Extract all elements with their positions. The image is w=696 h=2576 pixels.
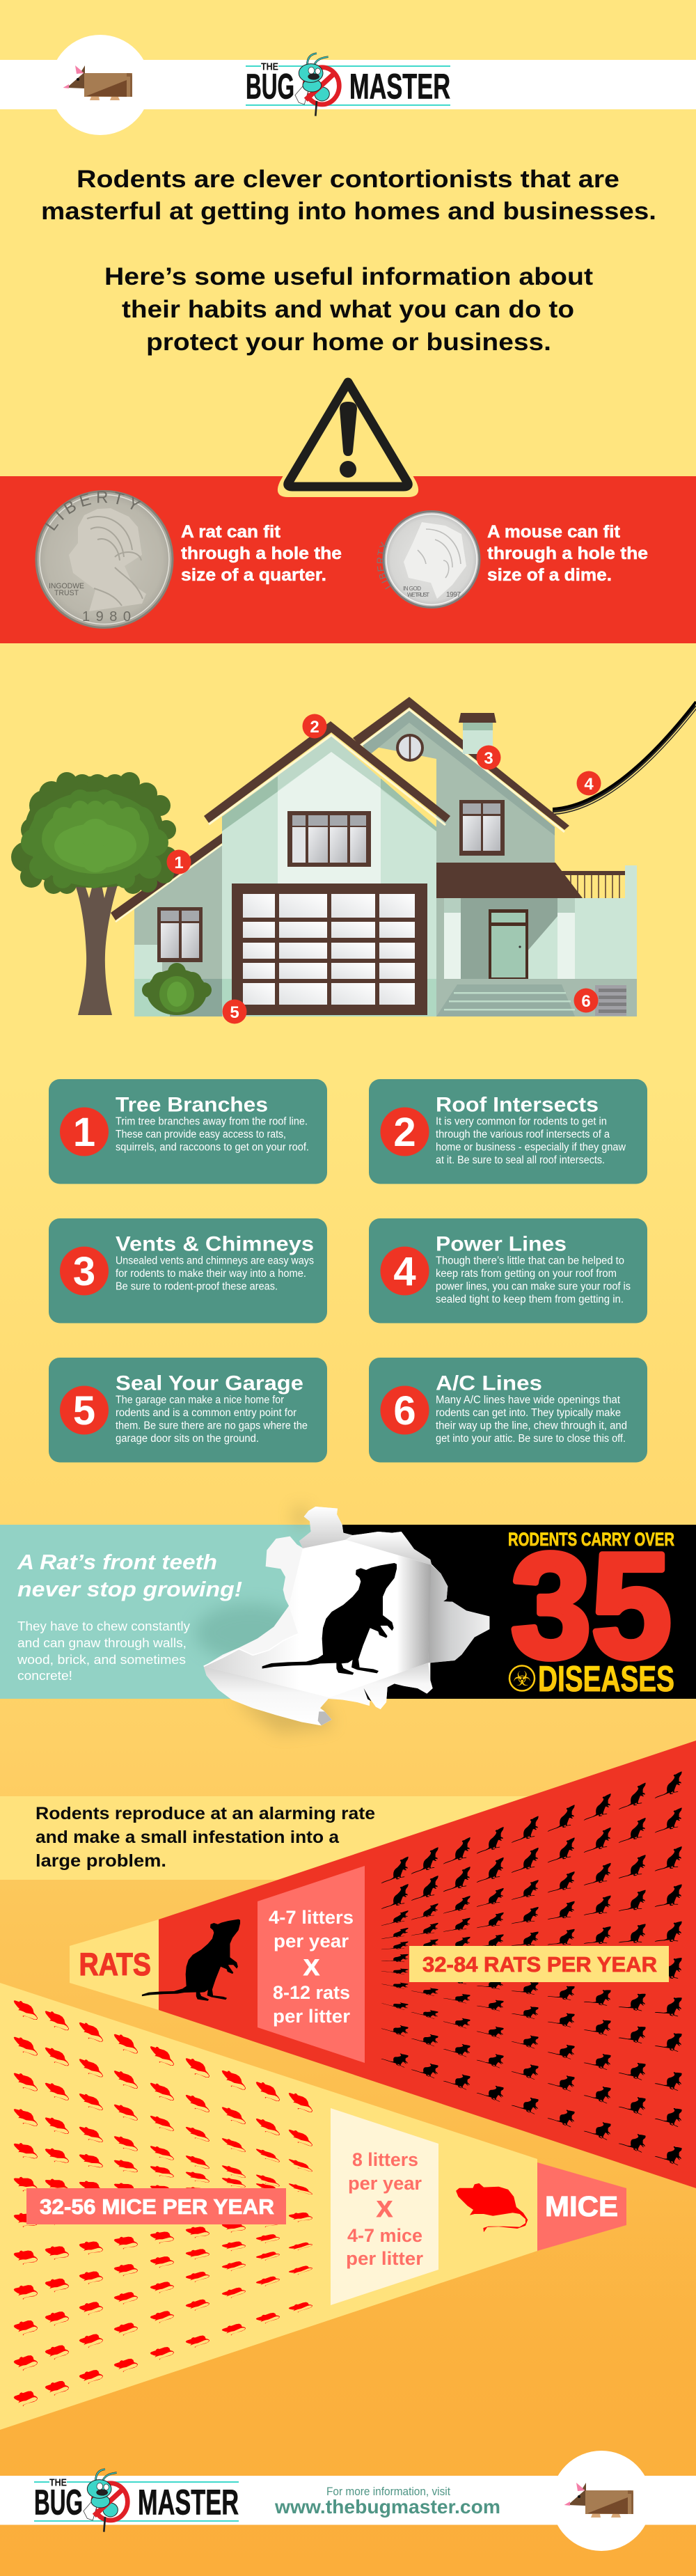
stat: rodents carry over 35 diseases: 35 bbox=[511, 1523, 672, 1689]
callout: mice per year bbox=[26, 2188, 286, 2224]
house illustration bbox=[11, 697, 696, 1023]
panel: mouse litter math: 4-7 mice bbox=[347, 2225, 422, 2246]
text: mouse fits through dime: through a hole the bbox=[487, 544, 648, 563]
card 5: seal your garage bbox=[49, 1358, 327, 1462]
panel: rat litter math bbox=[258, 1866, 365, 2063]
card 4: power lines: power lines, you can make sure your roof is bbox=[436, 1280, 631, 1292]
curl shadow on teal bbox=[195, 1601, 287, 1658]
label: mice: MICE bbox=[545, 2190, 618, 2222]
card 2: roof intersects: It is very common for rodents to get in bbox=[436, 1116, 607, 1128]
intro text: Here’s some useful information about bbox=[104, 263, 593, 290]
text: rat fits through quarter bbox=[181, 522, 342, 585]
logo: The Bug Master footer: THE bbox=[49, 2477, 67, 2489]
torn paper shadow bbox=[233, 1507, 334, 1734]
card 1: tree branches: Tree Branches bbox=[116, 1093, 268, 1117]
text: rat fits through quarter: size of a quarter. bbox=[181, 565, 326, 585]
front door bbox=[489, 909, 528, 979]
panel: coin sizes red band bbox=[0, 476, 696, 643]
card 2: roof intersects: 2 bbox=[393, 1110, 416, 1155]
card 6: A/C lines: 6 bbox=[393, 1388, 416, 1434]
porch railing bbox=[562, 871, 625, 898]
card 3: vents and chimneys: Be sure to rodent-proof these areas. bbox=[116, 1280, 278, 1292]
intro band: reproduction: Rodents reproduce at an alarming rate bbox=[35, 1804, 375, 1823]
chimney bbox=[459, 713, 496, 754]
intro text: protect your home or business. bbox=[146, 329, 551, 356]
card 5: seal your garage: garage door sits on the ground. bbox=[116, 1433, 259, 1445]
card 2: roof intersects: through the various roof intersects of a bbox=[436, 1129, 610, 1140]
icon: warning triangle bbox=[278, 372, 418, 497]
coin: dime: 1997 bbox=[446, 591, 461, 599]
label: rats: RATS bbox=[79, 1947, 151, 1982]
card 1: tree branches: 1 bbox=[73, 1110, 95, 1155]
text: rat teeth bbox=[17, 1550, 242, 1683]
garage door bbox=[232, 883, 427, 1015]
porch roof bbox=[436, 863, 583, 898]
card 4: power lines: 4 bbox=[393, 1249, 416, 1294]
intro text: masterful at getting into homes and businesses. bbox=[41, 198, 656, 225]
card 3: vents and chimneys: Vents & Chimneys bbox=[116, 1232, 314, 1256]
icon: rat bbox=[142, 1919, 240, 2001]
logo: The Bug Master footer: MASTER bbox=[138, 2483, 239, 2522]
card 4: power lines: Power Lines bbox=[436, 1232, 567, 1256]
footer band bbox=[0, 2451, 696, 2551]
card 5: seal your garage: rodents and is a common entry point for bbox=[116, 1407, 296, 1419]
text: rat fits through quarter: through a hole the bbox=[181, 544, 342, 563]
badges 1-6: 6 bbox=[581, 992, 591, 1011]
coin: quarter: 1980 bbox=[82, 609, 131, 625]
card 6: A/C lines: Many A/C lines have wide openings that bbox=[436, 1395, 621, 1406]
panel: rat litter math: per year bbox=[274, 1931, 349, 1951]
panel: mouse litter math: per year bbox=[348, 2173, 422, 2194]
intro text: Rodents are clever contortionists that are bbox=[77, 166, 619, 193]
text: mouse fits through dime: A mouse can fit bbox=[487, 522, 621, 542]
tree bbox=[11, 772, 177, 1015]
panel: rats funnel bbox=[70, 1741, 696, 2188]
card 6: A/C lines: their way up the line, chew through it, and bbox=[436, 1420, 627, 1431]
text: mouse fits through dime bbox=[487, 522, 648, 585]
panel: rat litter math: 4-7 litters bbox=[269, 1907, 354, 1928]
coin: quarter: LIBERTY bbox=[45, 492, 141, 531]
text: rat teeth: never stop growing! bbox=[17, 1577, 242, 1601]
badges 1-6 bbox=[167, 714, 601, 1023]
lower left window bbox=[157, 907, 203, 962]
panel: mouse litter math: per litter bbox=[346, 2248, 424, 2269]
logo: The Bug Master header: BUG bbox=[246, 67, 294, 107]
badges 1-6: 1 bbox=[174, 854, 184, 872]
card 6: A/C lines bbox=[369, 1358, 647, 1462]
card 1: tree branches bbox=[49, 1079, 327, 1184]
coin: dime: WE TRUST bbox=[407, 592, 429, 598]
intro band: reproduction bbox=[0, 1796, 528, 1880]
panel: mice funnel bbox=[0, 1983, 626, 2430]
text: rat teeth: wood, brick, and sometimes bbox=[17, 1653, 186, 1667]
panel: mouse litter math: X bbox=[377, 2197, 393, 2222]
callout: rats per year: 32-84 RATS PER YEAR bbox=[422, 1952, 657, 1977]
card 5: seal your garage: Seal Your Garage bbox=[116, 1372, 303, 1395]
card 1: tree branches: Trim tree branches away from the roof line. bbox=[116, 1116, 308, 1128]
text: mouse fits through dime: size of a dime. bbox=[487, 565, 612, 585]
logo: The Bug Master header: MASTER bbox=[349, 67, 450, 107]
card 3: vents and chimneys: 3 bbox=[73, 1249, 95, 1294]
card 6: A/C lines: get into your attic. Be sure to close this off. bbox=[436, 1433, 626, 1445]
card 1: tree branches: These can provide easy access to rats, bbox=[116, 1129, 286, 1140]
icon: footer rodent bbox=[564, 2483, 633, 2518]
card 4: power lines bbox=[369, 1218, 647, 1323]
header band bbox=[0, 35, 696, 135]
A/C unit bbox=[595, 985, 626, 1016]
rat silhouette bbox=[262, 1563, 397, 1675]
coin: dime bbox=[377, 510, 480, 608]
card 6: A/C lines: rodents can get into. They typically make bbox=[436, 1407, 621, 1419]
text: website bbox=[274, 2485, 500, 2518]
card 5: seal your garage: The garage can make a nice home for bbox=[116, 1395, 284, 1406]
logo: The Bug Master footer: BUG bbox=[34, 2483, 83, 2522]
panel: torn paper band bbox=[0, 1507, 696, 1734]
upper right window bbox=[459, 800, 505, 856]
panel: mouse litter math bbox=[331, 2108, 438, 2305]
text: website: For more information, visit bbox=[326, 2485, 450, 2498]
logo: The Bug Master footer bbox=[34, 2469, 239, 2532]
badges 1-6: 2 bbox=[310, 718, 319, 737]
mouse swarm bbox=[14, 1999, 313, 2410]
coin: quarter: INGODWE bbox=[49, 582, 84, 590]
panel: mouse litter math: 8 litters bbox=[352, 2149, 418, 2170]
logo: The Bug Master header bbox=[246, 54, 450, 116]
badges 1-6: 5 bbox=[230, 1003, 239, 1022]
front steps bbox=[436, 984, 575, 1016]
card 2: roof intersects: at it. Be sure to seal all roof intersects. bbox=[436, 1154, 605, 1166]
upper front window bbox=[287, 811, 371, 867]
house walls bbox=[134, 708, 637, 1016]
text: rat teeth: and can gnaw through walls, bbox=[17, 1636, 187, 1650]
panel: rat litter math: X bbox=[303, 1955, 320, 1980]
panel: rat litter math: 8-12 rats bbox=[273, 1982, 350, 2003]
intro text bbox=[41, 166, 656, 356]
card 2: roof intersects bbox=[369, 1079, 647, 1184]
card 3: vents and chimneys bbox=[49, 1218, 327, 1323]
logo: The Bug Master header: THE bbox=[261, 61, 278, 73]
power line bbox=[553, 702, 696, 813]
card 4: power lines: Though there’s little that can be helped to bbox=[436, 1255, 624, 1267]
coin: quarter bbox=[35, 490, 174, 629]
rat swarm bbox=[381, 1771, 682, 2167]
panel: rat litter math: per litter bbox=[273, 2006, 351, 2027]
card 5: seal your garage: 5 bbox=[73, 1388, 95, 1434]
icon: mouse bbox=[456, 2183, 528, 2232]
coin: dime: IN GOD bbox=[403, 586, 421, 592]
intro text: their habits and what you can do to bbox=[122, 296, 574, 323]
card 6: A/C lines: A/C Lines bbox=[436, 1372, 542, 1395]
bush bbox=[142, 963, 212, 1015]
intro band: reproduction: and make a small infestation into a bbox=[35, 1828, 340, 1847]
stat: rodents carry over 35 diseases: ☣ bbox=[513, 1667, 531, 1690]
text: rat teeth: They have to chew constantly bbox=[17, 1619, 190, 1633]
roofs bbox=[111, 697, 569, 922]
intro band: reproduction: large problem. bbox=[35, 1851, 166, 1871]
text: rat fits through quarter: A rat can fit bbox=[181, 522, 281, 542]
card 2: roof intersects: home or business - especially if they gnaw bbox=[436, 1141, 626, 1153]
badges 1-6: 3 bbox=[484, 749, 493, 768]
callout: mice per year: 32-56 MICE PER YEAR bbox=[40, 2194, 274, 2219]
coin: quarter: TRUST bbox=[54, 589, 79, 597]
card 4: power lines: keep rats from getting on your roof from bbox=[436, 1268, 617, 1280]
card 4: power lines: sealed tight to keep them from getting in. bbox=[436, 1294, 624, 1305]
text: rat teeth: concrete! bbox=[17, 1669, 72, 1683]
callout: rats per year bbox=[409, 1946, 669, 1982]
icon: header rodent bbox=[63, 65, 132, 100]
card 5: seal your garage: them. Be sure there are no gaps where the bbox=[116, 1420, 308, 1431]
text: website: www.thebugmaster.com bbox=[274, 2496, 500, 2518]
card 1: tree branches: squirrels, and raccoons to get on your roof. bbox=[116, 1141, 309, 1153]
torn paper sheet bbox=[204, 1507, 489, 1725]
text: rat teeth: A Rat’s front teeth bbox=[17, 1550, 217, 1574]
card 2: roof intersects: Roof Intersects bbox=[436, 1093, 599, 1117]
round attic window bbox=[397, 735, 422, 760]
coin: dime: LIBERTY bbox=[377, 542, 390, 589]
card 3: vents and chimneys: Unsealed vents and chimneys are easy ways bbox=[116, 1255, 314, 1267]
badges 1-6: 4 bbox=[584, 775, 594, 794]
card 3: vents and chimneys: for rodents to make their way into a home. bbox=[116, 1268, 306, 1280]
